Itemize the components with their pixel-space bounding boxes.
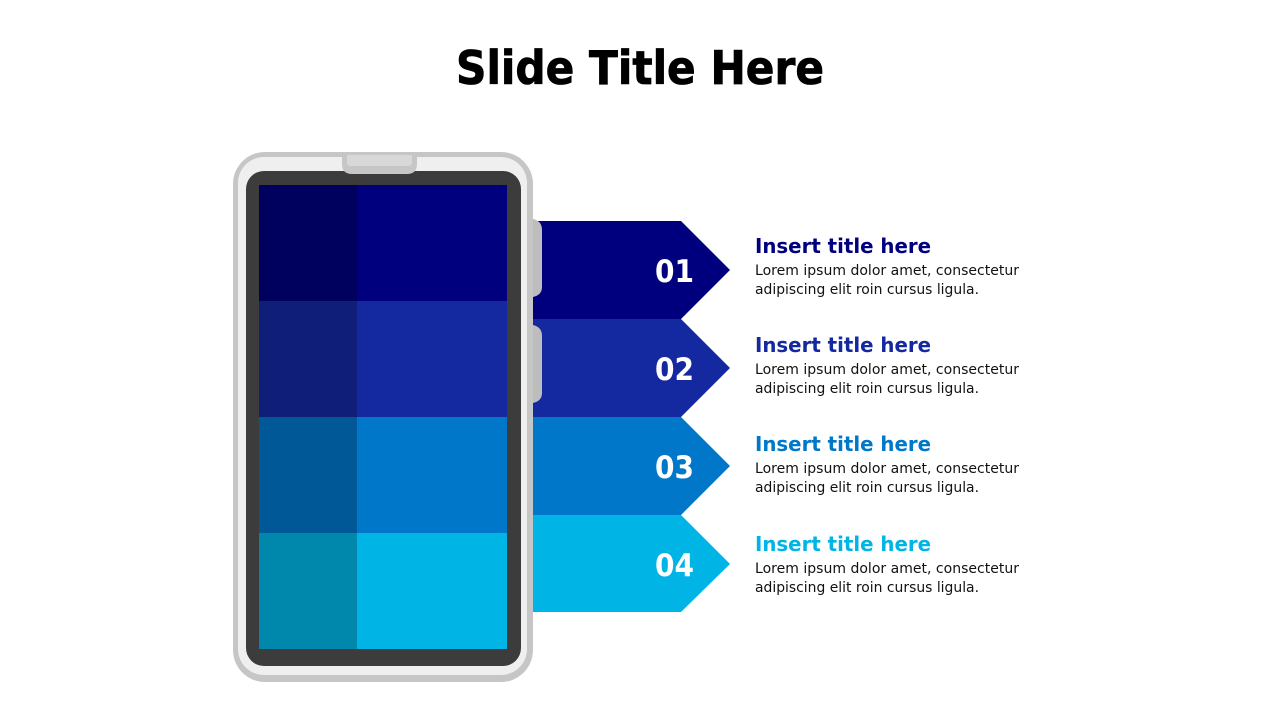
text block 01: Insert title here [755,234,931,258]
text block 02 [755,333,1019,397]
notch inner [347,155,412,166]
arrow 03: 03 [655,450,694,486]
phone bezel [246,171,521,666]
text block 01: adipiscing elit roin cursus ligula. [755,282,979,298]
text block 03: Lorem ipsum dolor amet, consectetur [755,461,1019,477]
text block 01 [755,234,1019,298]
phone side buttons [530,219,542,403]
text block 02: Lorem ipsum dolor amet, consectetur [755,362,1019,378]
text block 01: Lorem ipsum dolor amet, consectetur [755,263,1019,279]
arrow 02 [533,319,730,417]
phone [233,152,533,682]
screen row 1 [259,185,507,301]
text block 03: adipiscing elit roin cursus ligula. [755,480,979,496]
screen row 4 [259,533,507,649]
text block 04: adipiscing elit roin cursus ligula. [755,580,979,596]
text block 03: Insert title here [755,432,931,456]
text block 04: Insert title here [755,532,931,556]
arrow 04 [533,515,730,612]
text block 04: Lorem ipsum dolor amet, consectetur [755,561,1019,577]
notch [342,153,417,174]
arrow 02: 02 [655,352,694,388]
arrow 01 [533,221,730,319]
text block 02: Insert title here [755,333,931,357]
screen row 3 [259,417,507,533]
arrow 04: 04 [655,548,694,584]
phone outer frame [233,152,533,682]
title: Slide Title Here [456,41,824,95]
text block 02: adipiscing elit roin cursus ligula. [755,381,979,397]
screen row 2 [259,301,507,417]
text block 04 [755,532,1019,596]
arrow 01: 01 [655,254,694,290]
arrow 03 [533,417,730,515]
text block 03 [755,432,1019,496]
phone body [238,157,527,675]
